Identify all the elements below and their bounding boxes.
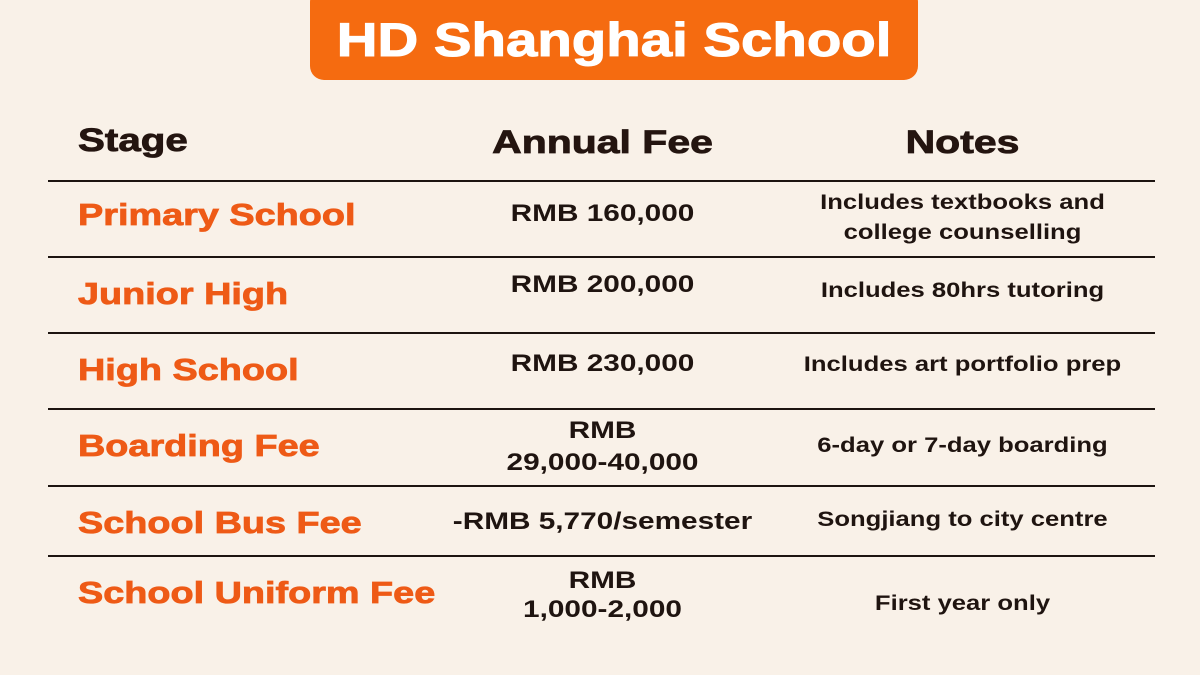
row: high school <box>78 350 1121 387</box>
row: primary school: Includes textbooks and <box>820 191 1105 214</box>
row: primary school <box>78 191 1105 244</box>
row: primary school: college counselling <box>844 221 1081 244</box>
row: junior high: Junior High <box>78 276 288 311</box>
title banner: HD Shanghai School <box>337 13 891 66</box>
row: school bus fee: School Bus Fee <box>78 505 362 540</box>
row: school uniform fee <box>78 567 1050 623</box>
row: school uniform fee: RMB <box>569 567 636 594</box>
header: Stage: Stage <box>78 122 188 158</box>
row: school uniform fee: 1,000-2,000 <box>523 596 682 623</box>
row: junior high <box>78 271 1104 311</box>
row: boarding fee <box>78 417 1108 476</box>
row: school bus fee: Songjiang to city centre <box>817 508 1108 531</box>
row: junior high: Includes 80hrs tutoring <box>821 279 1104 302</box>
row: boarding fee: RMB <box>569 417 636 444</box>
row: high school: High School <box>78 352 299 387</box>
header: Annual Fee: Annual Fee <box>492 124 713 160</box>
row: boarding fee: 6-day or 7-day boarding <box>817 434 1108 457</box>
row: primary school: RMB 160,000 <box>511 200 694 227</box>
title banner <box>310 0 918 80</box>
row: junior high: RMB 200,000 <box>511 271 694 298</box>
row: school uniform fee: First year only <box>875 592 1050 615</box>
row: high school: Includes art portfolio prep <box>804 353 1121 376</box>
row: boarding fee: Boarding Fee <box>78 428 320 463</box>
row: school uniform fee: School Uniform Fee <box>78 575 435 610</box>
row: high school: RMB 230,000 <box>511 350 694 377</box>
row: school bus fee: -RMB 5,770/semester <box>453 508 752 535</box>
row: boarding fee: 29,000-40,000 <box>507 449 698 476</box>
header: Notes: Notes <box>906 124 1019 160</box>
row: school bus fee <box>78 505 1108 540</box>
row: primary school: Primary School <box>78 197 355 232</box>
table <box>78 122 1019 160</box>
